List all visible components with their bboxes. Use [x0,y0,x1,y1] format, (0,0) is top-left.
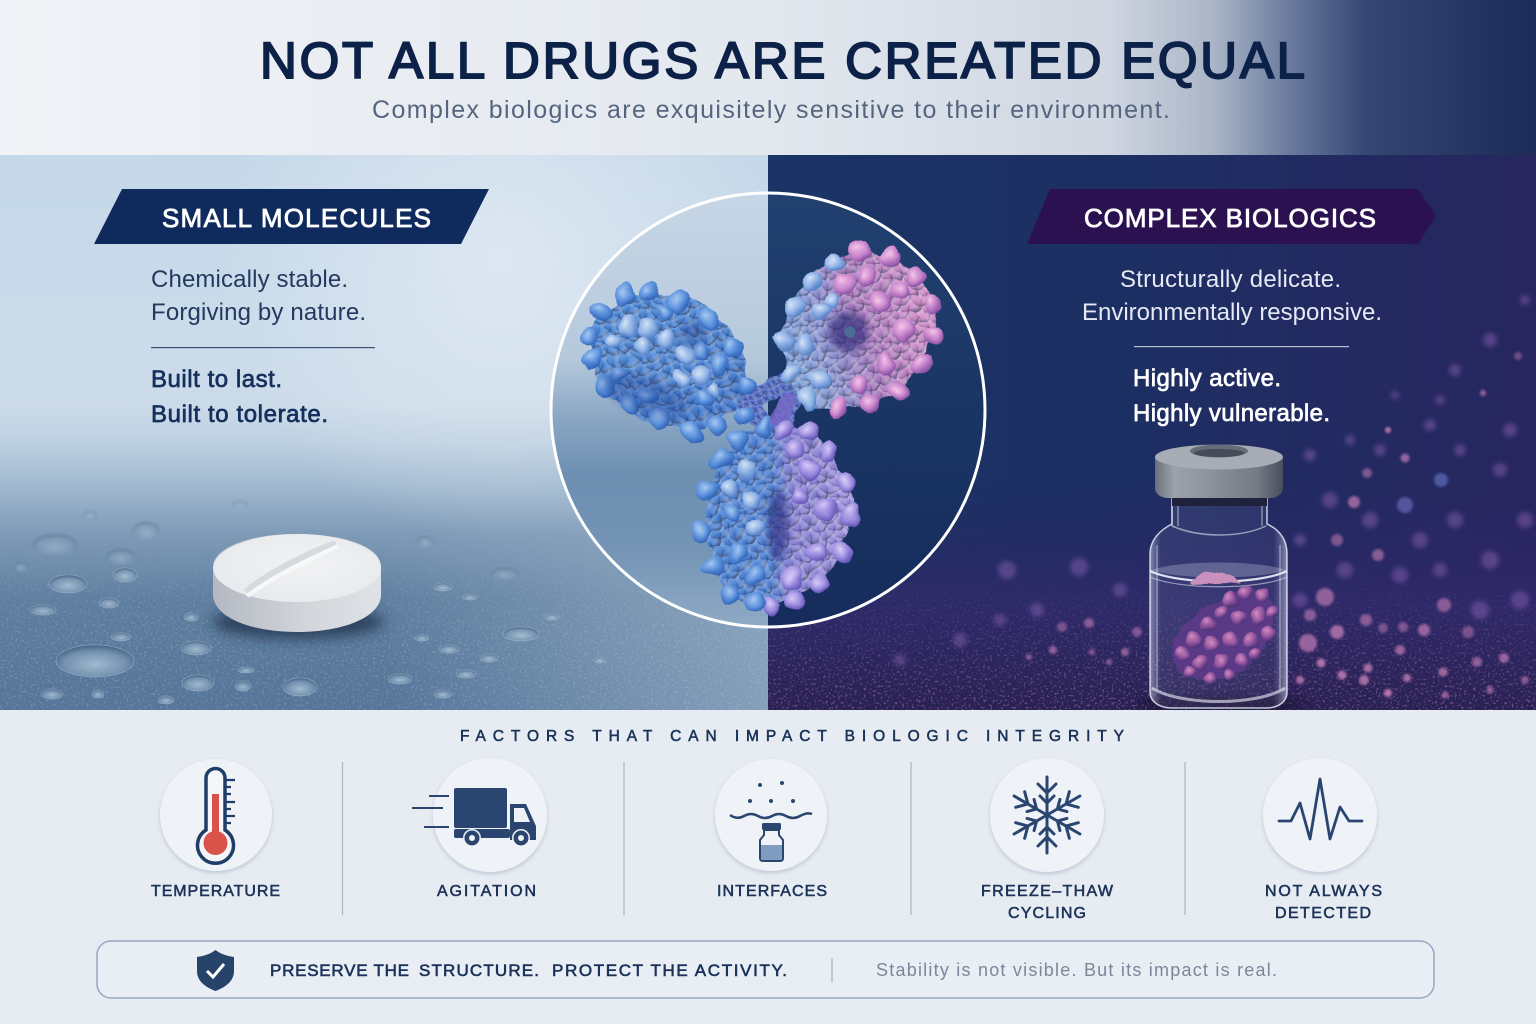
icon: thermometer [198,768,235,863]
right description: Highly vulnerable. [1133,400,1330,427]
antibody protein model [566,242,944,615]
factor: temperature [151,759,280,900]
left description: Built to last. [151,366,282,393]
factor: not always detected: DETECTED [1275,905,1371,922]
left description: Forgiving by nature. [151,299,366,326]
callout bar [97,941,1434,998]
lobe shading [596,312,868,561]
protein aggregate in vial [1172,572,1278,684]
right description: Environmentally responsive. [1082,299,1382,326]
subtitle: Complex biologics are exquisitely sensitive to their environment. [372,96,1170,124]
header band [0,0,1536,155]
left banner: small molecules [94,189,489,244]
factors heading: FACTORS THAT CAN IMPACT BIOLOGIC INTEGRITY [460,728,1124,745]
lobe: fc stem [692,419,861,615]
factor: interfaces [715,759,827,900]
circle outline [551,193,985,627]
factor: freeze-thaw cycling: CYCLING [1008,905,1086,922]
vial [1136,444,1304,712]
panel: complex biologics background [768,155,1536,710]
callout message: PRESERVE THE [270,961,409,980]
callout message [270,961,787,980]
right banner: complex biologics [1027,189,1436,244]
left description: Chemically stable. [151,266,348,293]
hinge region [738,376,798,446]
factor: not always detected [1263,758,1382,922]
circle interior [551,193,985,627]
callout message: STRUCTURE. [419,961,539,980]
tablet [212,534,384,639]
icon: moving truck [412,788,536,847]
left description [151,266,375,428]
bottom section background [0,710,1536,1024]
icon: snowflake [1010,777,1084,853]
right description: Highly active. [1133,365,1281,392]
bokeh lights [1026,352,1529,698]
right banner: complex biologics: COMPLEX BIOLOGICS [1084,203,1376,233]
factor: temperature: TEMPERATURE [151,883,280,900]
factor: freeze-thaw cycling: FREEZE–THAW [981,883,1114,900]
panel: small molecules background [0,155,768,710]
vial cap [1155,444,1283,506]
callout note: Stability is not visible. But its impact is real. [876,960,1277,980]
lobe: fab arm left [566,266,770,454]
icon: pulse signal [1279,779,1362,839]
factor: agitation [412,758,547,900]
factor: agitation: AGITATION [437,883,536,900]
icon: air-liquid interface with vial [730,781,812,861]
lobe: fab arm right [774,242,944,417]
left description: Built to tolerate. [151,401,328,428]
right description [1082,266,1382,427]
factor: freeze-thaw cycling [981,758,1114,922]
left banner: small molecules: SMALL MOLECULES [162,203,431,233]
water droplets on surface [30,568,606,704]
factor: not always detected: NOT ALWAYS [1265,883,1382,900]
factor: interfaces: INTERFACES [717,883,827,900]
dim background bokeh lights [894,295,1533,666]
title: NOT ALL DRUGS ARE CREATED EQUAL [260,32,1305,89]
divider lines [342,762,1185,915]
right description: Structurally delicate. [1120,266,1341,293]
callout message: PROTECT THE ACTIVITY. [552,961,787,980]
distant water droplets [13,501,519,580]
center circle with antibody [551,193,985,627]
icon: shield with check [197,950,234,991]
vial glass [1150,498,1287,708]
